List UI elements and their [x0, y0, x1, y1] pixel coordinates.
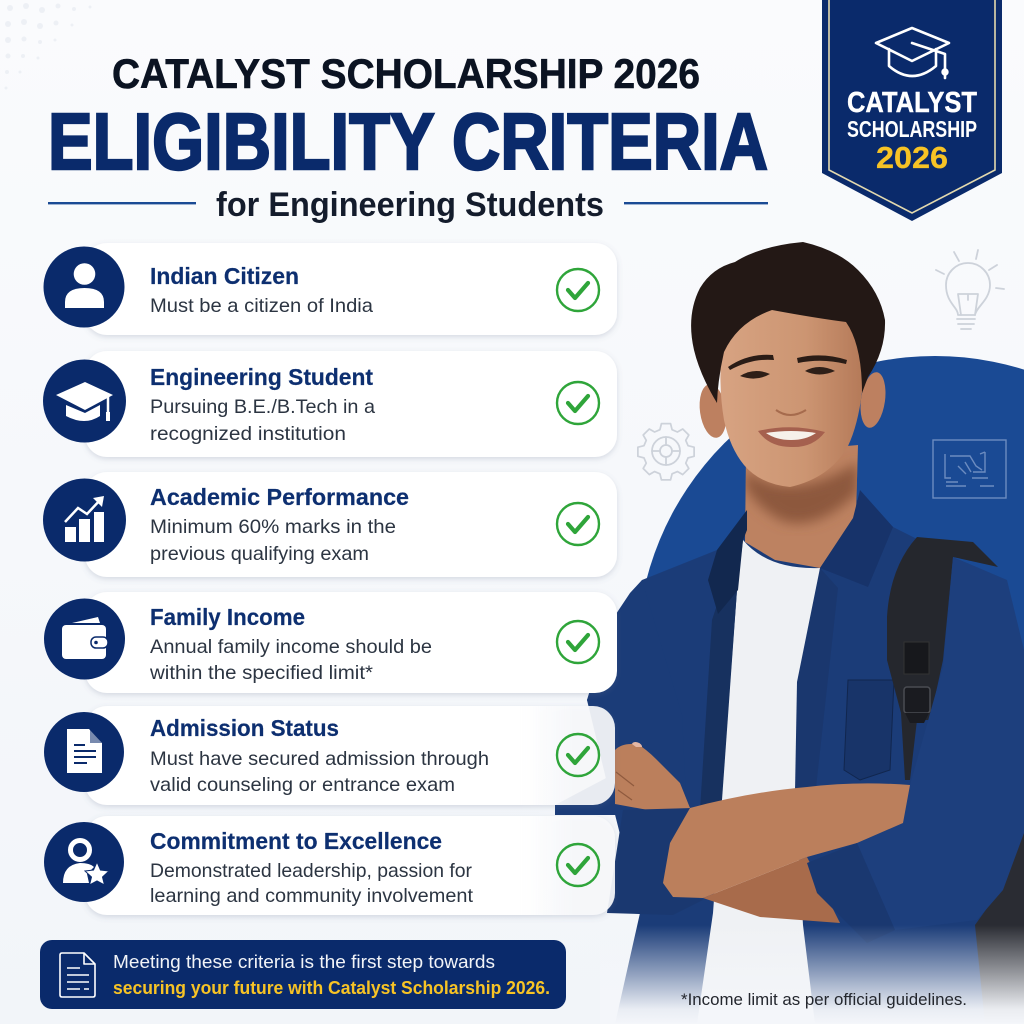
upper forearm	[663, 783, 910, 898]
card: Family Income: within the specified limit*	[149, 662, 373, 684]
card: Academic Performance	[43, 472, 617, 577]
icon: badge graduation cap	[876, 28, 949, 78]
card: Indian Citizen	[44, 243, 617, 335]
icon: blueprint	[933, 440, 1006, 498]
callout banner	[40, 940, 566, 1009]
card: Engineering Student: Pursuing B.E./B.Tech in a	[150, 396, 375, 418]
card: Admission Status	[44, 706, 615, 805]
check	[557, 734, 599, 776]
right cuff	[807, 843, 895, 943]
fade of student at bottom	[600, 925, 1024, 1024]
check	[557, 621, 599, 663]
card: Family Income: Annual family income should be	[150, 636, 432, 658]
card: Academic Performance: Minimum 60% marks in the	[150, 516, 396, 538]
right sleeve	[857, 557, 1024, 930]
card: Academic Performance: previous qualifying exam	[150, 543, 369, 565]
right collar	[820, 490, 893, 587]
lower forearm	[703, 857, 840, 923]
icon: gear	[638, 424, 694, 480]
card: Family Income: Family Income	[150, 604, 305, 630]
card: Commitment to Excellence	[44, 816, 615, 915]
eyebrows	[728, 355, 774, 370]
hand	[615, 743, 690, 814]
check	[557, 269, 599, 311]
ears	[696, 382, 730, 440]
skin	[720, 304, 862, 487]
badge: Catalyst Scholarship 2026	[822, 0, 1002, 221]
check	[557, 503, 599, 545]
card: Indian Citizen: Must be a citizen of India	[150, 295, 373, 317]
card: Engineering Student	[43, 351, 617, 457]
callout banner: Meeting these criteria is the first step towards	[113, 952, 495, 972]
shirt pocket	[844, 680, 894, 780]
title: eligibility criteria: ELIGIBILITY CRITERIA	[48, 97, 768, 186]
panel: blue circle behind student	[637, 356, 1024, 952]
card: Indian Citizen: Indian Citizen	[150, 263, 299, 289]
face and head	[691, 242, 889, 487]
smile	[758, 427, 825, 447]
strap backpack	[887, 537, 998, 780]
nose	[776, 410, 806, 415]
left sleeve	[555, 580, 687, 815]
icon: wallet	[44, 598, 125, 680]
subtitle with rules: for Engineering Students	[216, 186, 604, 224]
card: Commitment to Excellence: learning and community involvement	[150, 885, 474, 907]
icon: light bulb	[936, 250, 1004, 329]
footnote: *Income limit as per official guidelines.	[681, 991, 967, 1009]
card: Academic Performance: Academic Performance	[150, 484, 409, 510]
card: Admission Status: Admission Status	[150, 715, 339, 741]
hair	[691, 242, 885, 403]
card: Commitment to Excellence: Demonstrated leadership, passion for	[150, 860, 473, 882]
check	[557, 382, 599, 424]
card: Admission Status: Must have secured admission through	[150, 748, 489, 770]
icon: graduation cap	[43, 360, 126, 442]
backpack lower right	[975, 825, 1024, 1024]
left collar	[708, 510, 747, 614]
shirt body	[587, 500, 1024, 1024]
icon: document outline	[60, 953, 95, 997]
check	[557, 844, 599, 886]
card: Engineering Student: Engineering Student	[150, 364, 373, 390]
title: scholarship name: CATALYST SCHOLARSHIP 2026	[112, 50, 700, 97]
card: Admission Status: valid counseling or entrance exam	[150, 774, 455, 796]
badge: Catalyst Scholarship 2026: SCHOLARSHIP	[847, 116, 977, 142]
shirt plackets	[700, 590, 737, 816]
decorative dots top left	[4, 3, 92, 90]
icon: person	[44, 246, 124, 328]
icon: person with star	[44, 822, 124, 902]
icon: document	[44, 712, 124, 792]
eyes	[740, 371, 770, 379]
illustration: student	[555, 242, 1024, 1024]
card: Engineering Student: recognized institution	[150, 423, 346, 445]
left cuff	[607, 808, 703, 915]
icon: chart	[43, 478, 126, 562]
neck	[745, 445, 858, 568]
white t-shirt	[697, 540, 820, 1024]
callout banner: securing your future with Catalyst Scholarship 2026.	[113, 978, 550, 998]
card: Family Income	[44, 592, 617, 693]
card: Commitment to Excellence: Commitment to Excellence	[150, 828, 442, 854]
badge: Catalyst Scholarship 2026: CATALYST	[847, 87, 977, 119]
badge: Catalyst Scholarship 2026: 2026	[876, 140, 948, 175]
